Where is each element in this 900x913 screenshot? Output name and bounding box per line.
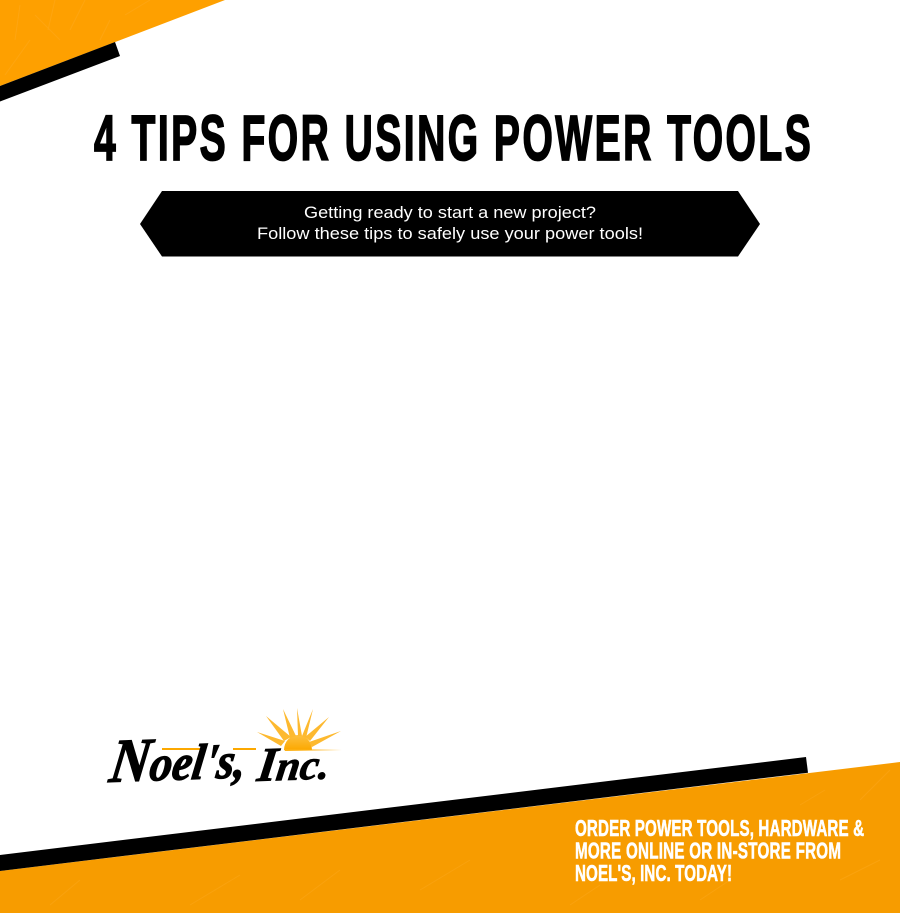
- title: 4 TIPS FOR USING POWER TOOLS: [94, 103, 811, 174]
- icon: sun: [162, 708, 342, 751]
- logo: Noel's, Inc.: [105, 708, 342, 796]
- call to action text: NOEL'S, INC. TODAY!: [575, 861, 732, 887]
- logo wordmark: Inc.: [253, 737, 334, 792]
- subtitle banner: [140, 191, 760, 256]
- top-left corner banner: [0, 0, 225, 102]
- subtitle banner: Follow these tips to safely use your power tools!: [257, 224, 643, 243]
- call to action text: MORE ONLINE OR IN-STORE FROM: [575, 838, 841, 864]
- logo wordmark: Noel's,: [105, 721, 252, 796]
- bottom-right footer banner: [0, 757, 900, 913]
- black stripe: [0, 757, 808, 871]
- logo wordmark: [105, 721, 334, 796]
- subtitle banner: Getting ready to start a new project?: [304, 203, 596, 222]
- call to action text: [575, 816, 864, 887]
- call to action text: ORDER POWER TOOLS, HARDWARE &: [575, 816, 864, 842]
